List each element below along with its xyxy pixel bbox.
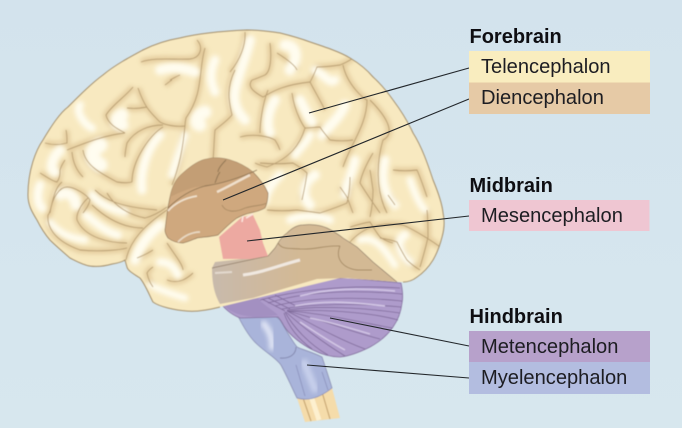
label: Mesencephalon: Mesencephalon [481, 205, 623, 227]
panel: forebrain legend [469, 26, 650, 114]
metencephalon: cerebellum and pons [218, 278, 403, 357]
label: Myelencephalon: Myelencephalon [481, 367, 627, 389]
label: Myelencephalon [469, 362, 650, 394]
telencephalon: cerebrum [28, 30, 444, 311]
label: Telencephalon [469, 51, 650, 82]
leader line: myelencephalon [307, 365, 469, 378]
leader line: telencephalon [309, 68, 469, 113]
panel: hindbrain legend [469, 306, 650, 394]
label: Diencephalon [469, 82, 650, 114]
label: Telencephalon: Telencephalon [481, 56, 611, 78]
heading: Midbrain: Midbrain [470, 175, 553, 197]
leader line: metencephalon [330, 318, 469, 346]
lower overlay: temporal region over brainstem [212, 225, 397, 304]
heading: Hindbrain: Hindbrain [470, 306, 563, 328]
leader line: diencephalon [223, 99, 469, 200]
mesencephalon: midbrain [219, 214, 268, 259]
diencephalon: thalamus overlay [165, 158, 268, 243]
label: Metencephalon: Metencephalon [481, 336, 618, 358]
myelencephalon: brainstem [238, 314, 332, 399]
leader line: mesencephalon [247, 216, 469, 241]
label: Metencephalon [469, 331, 650, 362]
label: Diencephalon: Diencephalon [481, 87, 604, 109]
heading: Forebrain: Forebrain [470, 26, 562, 48]
brain illustration [28, 30, 444, 422]
label: Mesencephalon [469, 200, 650, 231]
spinal cord [297, 388, 340, 422]
panel: midbrain legend [469, 175, 650, 231]
